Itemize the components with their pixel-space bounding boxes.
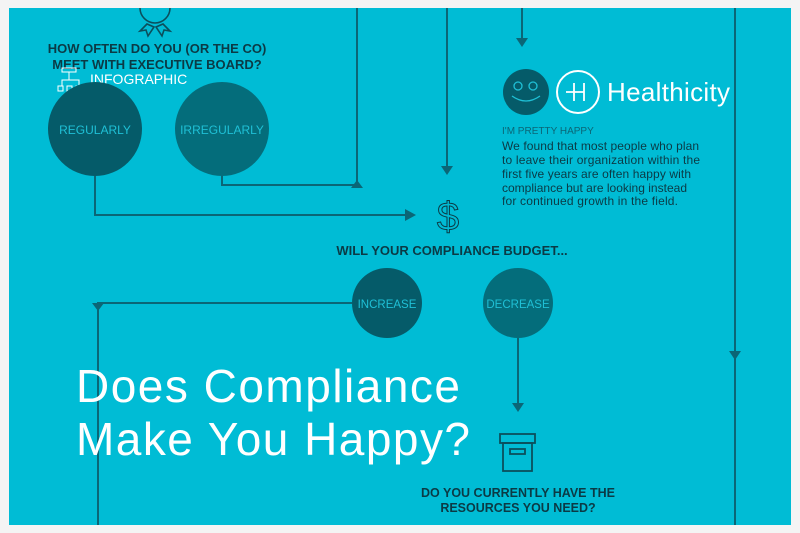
circle: increase: INCREASE <box>358 299 417 311</box>
circle: decrease <box>483 268 553 338</box>
heading: how often <box>48 41 266 72</box>
icon: award <box>140 8 170 36</box>
circle: regularly <box>48 82 142 176</box>
text block: pretty happy: to leave their organization within the <box>502 153 700 167</box>
logo: infographic: INFOGRAPHIC <box>90 71 187 87</box>
circle: regularly: REGULARLY <box>59 123 131 137</box>
text block: pretty happy: compliance but are looking instead <box>502 181 687 195</box>
logo: infographic <box>58 68 187 91</box>
heading: how often: HOW OFTEN DO YOU (OR THE CO) <box>48 41 266 56</box>
arrowheads <box>92 38 741 412</box>
heading: resources <box>421 486 615 515</box>
text block: pretty happy: We found that most people who plan <box>502 139 699 153</box>
text block: pretty happy <box>502 126 700 208</box>
circle: irregularly: IRREGULARLY <box>180 123 264 137</box>
text block: pretty happy: for continued growth in the field. <box>502 194 678 208</box>
icon: archive box <box>500 434 535 471</box>
logo: healthicity <box>557 71 730 113</box>
icon: dollar: $ <box>437 195 459 239</box>
circle: increase <box>352 268 422 338</box>
connector lines <box>95 8 735 525</box>
circle: decrease: DECREASE <box>486 299 550 311</box>
title: Make You Happy? <box>76 413 470 465</box>
heading: budget: WILL YOUR COMPLIANCE BUDGET... <box>336 243 568 258</box>
icon: smiley <box>503 69 549 115</box>
title: Does Compliance <box>76 360 460 412</box>
heading: how often: MEET WITH EXECUTIVE BOARD? <box>52 57 262 72</box>
text block: pretty happy: I'M PRETTY HAPPY <box>502 126 594 137</box>
circle: irregularly <box>175 82 269 176</box>
heading: resources: RESOURCES YOU NEED? <box>440 501 596 515</box>
logo: healthicity: Healthicity <box>607 77 730 107</box>
text block: pretty happy: first five years are often happy with <box>502 167 691 181</box>
heading: resources: DO YOU CURRENTLY HAVE THE <box>421 486 615 500</box>
title <box>76 360 470 465</box>
